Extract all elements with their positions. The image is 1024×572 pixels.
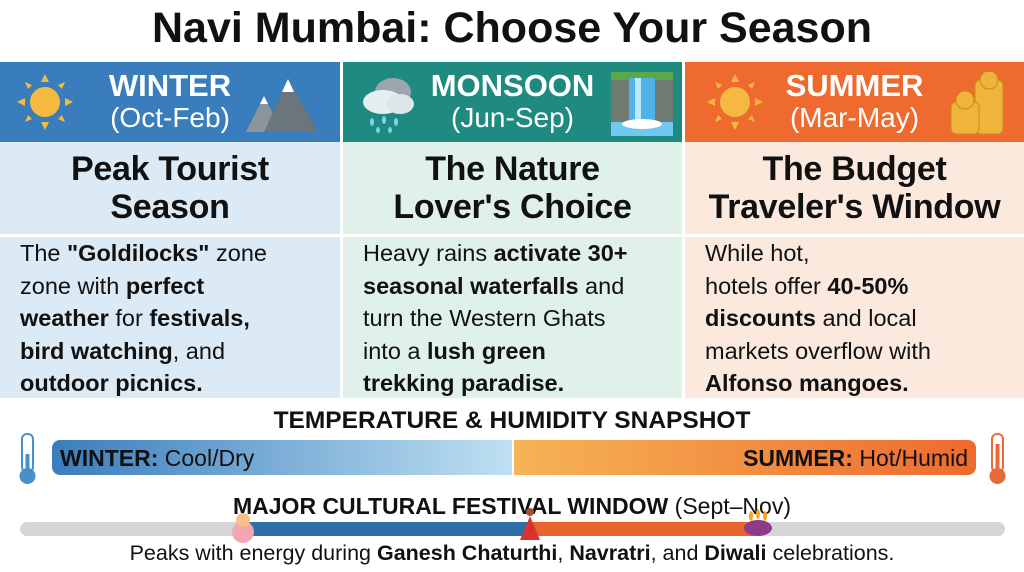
icon: sun: [17, 74, 73, 130]
caption: Peaks with energy during Ganesh Chaturthi, Navratri, and Diwali celebrations.: [130, 541, 894, 565]
winter header: (Oct-Feb): [110, 102, 230, 133]
monsoon body: [343, 237, 682, 398]
monsoon body: turn the Western Ghats: [363, 305, 606, 331]
winter heading: Season: [110, 188, 230, 226]
summer body: discounts and local: [705, 305, 917, 331]
panel: summer: [685, 62, 1024, 398]
heading: temperature snapshot: TEMPERATURE & HUMIDITY SNAPSHOT: [274, 407, 750, 434]
festival timeline bar: [20, 508, 1005, 543]
icon: ganesh: [232, 513, 254, 543]
monsoon heading: The Nature: [425, 150, 600, 188]
monsoon body: Heavy rains activate 30+: [363, 240, 628, 266]
summer header: [685, 62, 1024, 142]
monsoon heading: [343, 142, 682, 234]
summer header: (Mar-May): [790, 102, 919, 133]
summer body: Alfonso mangoes.: [705, 370, 909, 396]
summer body: markets overflow with: [705, 338, 931, 364]
heading: festival window: MAJOR CULTURAL FESTIVAL WINDOW (Sept–Nov): [233, 493, 791, 519]
monsoon heading: Lover's Choice: [393, 188, 632, 226]
winter body: bird watching, and: [20, 338, 225, 364]
monsoon body: into a lush green: [363, 338, 546, 364]
winter heading: [0, 142, 340, 234]
panel: winter: [0, 62, 340, 398]
summer body: hotels offer 40-50%: [705, 272, 908, 298]
panel: monsoon: [343, 62, 682, 398]
winter body: The "Goldilocks" zone: [20, 240, 267, 266]
title: Navi Mumbai: Choose Your Season: [152, 4, 872, 52]
icon: diyas: [744, 509, 772, 536]
summer body: [685, 237, 1024, 398]
summer body: While hot,: [705, 240, 810, 266]
temperature bar: SUMMER: Hot/Humid: [743, 445, 968, 471]
summer heading: [685, 142, 1024, 234]
monsoon header: (Jun-Sep): [451, 102, 574, 133]
icon: coins: [950, 72, 1004, 134]
temperature bar: WINTER: Cool/Dry: [60, 445, 254, 471]
icon: hot thermometer: [990, 433, 1006, 484]
icon: rain cloud: [363, 78, 414, 133]
winter heading: Peak Tourist: [71, 150, 269, 188]
winter body: zone with perfect: [20, 272, 204, 298]
winter body: outdoor picnics.: [20, 370, 203, 396]
icon: mountains: [246, 79, 318, 132]
winter body: weather for festivals,: [20, 305, 250, 331]
summer heading: The Budget: [762, 150, 946, 188]
winter header: [0, 62, 340, 142]
icon: sun: [707, 74, 763, 130]
icon: waterfall: [611, 72, 673, 136]
monsoon header: [343, 62, 682, 142]
monsoon body: seasonal waterfalls and: [363, 272, 624, 298]
monsoon body: trekking paradise.: [363, 370, 564, 396]
winter header: WINTER: [109, 68, 231, 103]
winter body: [0, 237, 340, 398]
monsoon header: MONSOON: [431, 68, 594, 103]
summer header: SUMMER: [786, 68, 923, 103]
icon: cold thermometer: [20, 433, 36, 484]
temperature bar: [52, 440, 976, 475]
icon: dancer: [520, 508, 540, 540]
summer heading: Traveler's Window: [709, 188, 1000, 226]
